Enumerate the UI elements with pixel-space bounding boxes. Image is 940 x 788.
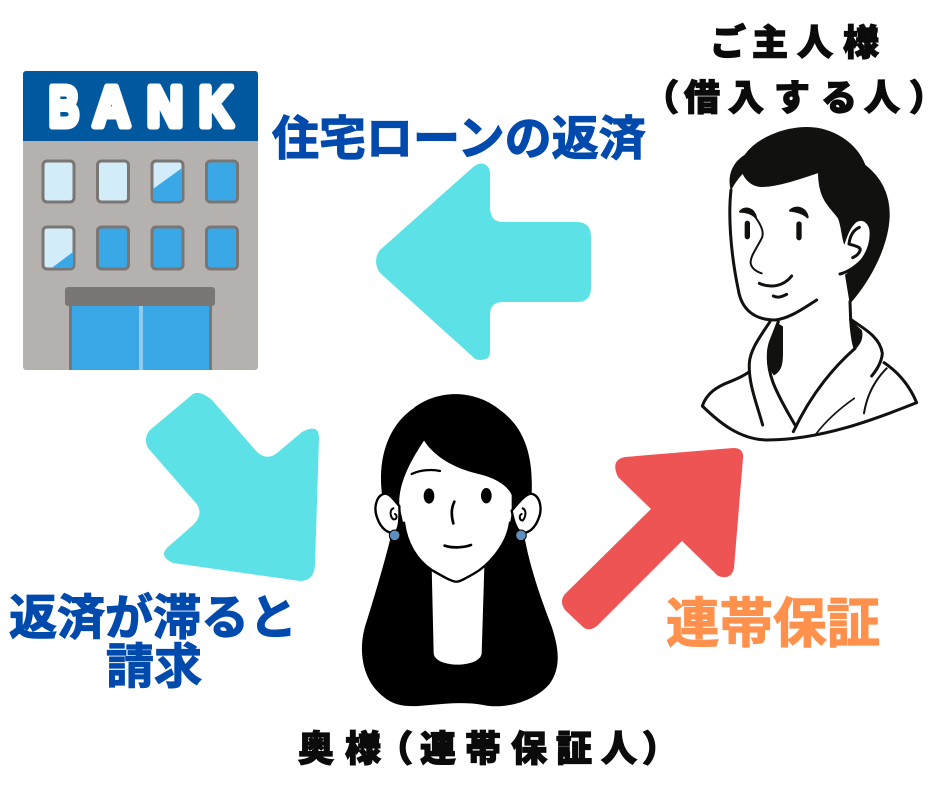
wife ears and earrings [375, 494, 541, 541]
bank sign lettering: N [147, 75, 183, 139]
label: wife (guarantor): 奥様（連帯保証人） [298, 728, 678, 769]
label: husband (borrower) [643, 22, 940, 118]
heading: claim when repayment is late: 返済が滞ると [9, 592, 297, 645]
icon: bank building [23, 71, 258, 370]
illustration: husband [702, 127, 917, 440]
heading: joint guarantee: 連帯保証 [666, 595, 880, 654]
arrow: loan repayment to bank [376, 164, 591, 360]
husband robe [702, 302, 917, 440]
arrow: bank claims from wife [146, 393, 319, 581]
arrow: joint guarantee [562, 448, 743, 629]
husband face [730, 190, 865, 320]
heading: claim when repayment is late [9, 592, 297, 694]
bank sign lettering: A [93, 75, 130, 139]
bank windows [43, 161, 238, 269]
heading: claim when repayment is late: 請求 [106, 641, 202, 694]
husband hair [730, 127, 889, 303]
wife neck [432, 567, 484, 665]
wife face [399, 441, 512, 582]
illustration: wife [362, 394, 558, 706]
wife hair [362, 394, 558, 706]
label: husband (borrower): （借入する人） [643, 77, 940, 118]
bank sign lettering [49, 75, 233, 139]
bank sign lettering: B [49, 75, 79, 139]
label: husband (borrower): ご主人様 [710, 22, 879, 63]
bank sign lettering: K [199, 75, 233, 139]
bank entrance [65, 287, 215, 370]
heading: mortgage repayment: 住宅ローンの返済 [272, 112, 646, 165]
